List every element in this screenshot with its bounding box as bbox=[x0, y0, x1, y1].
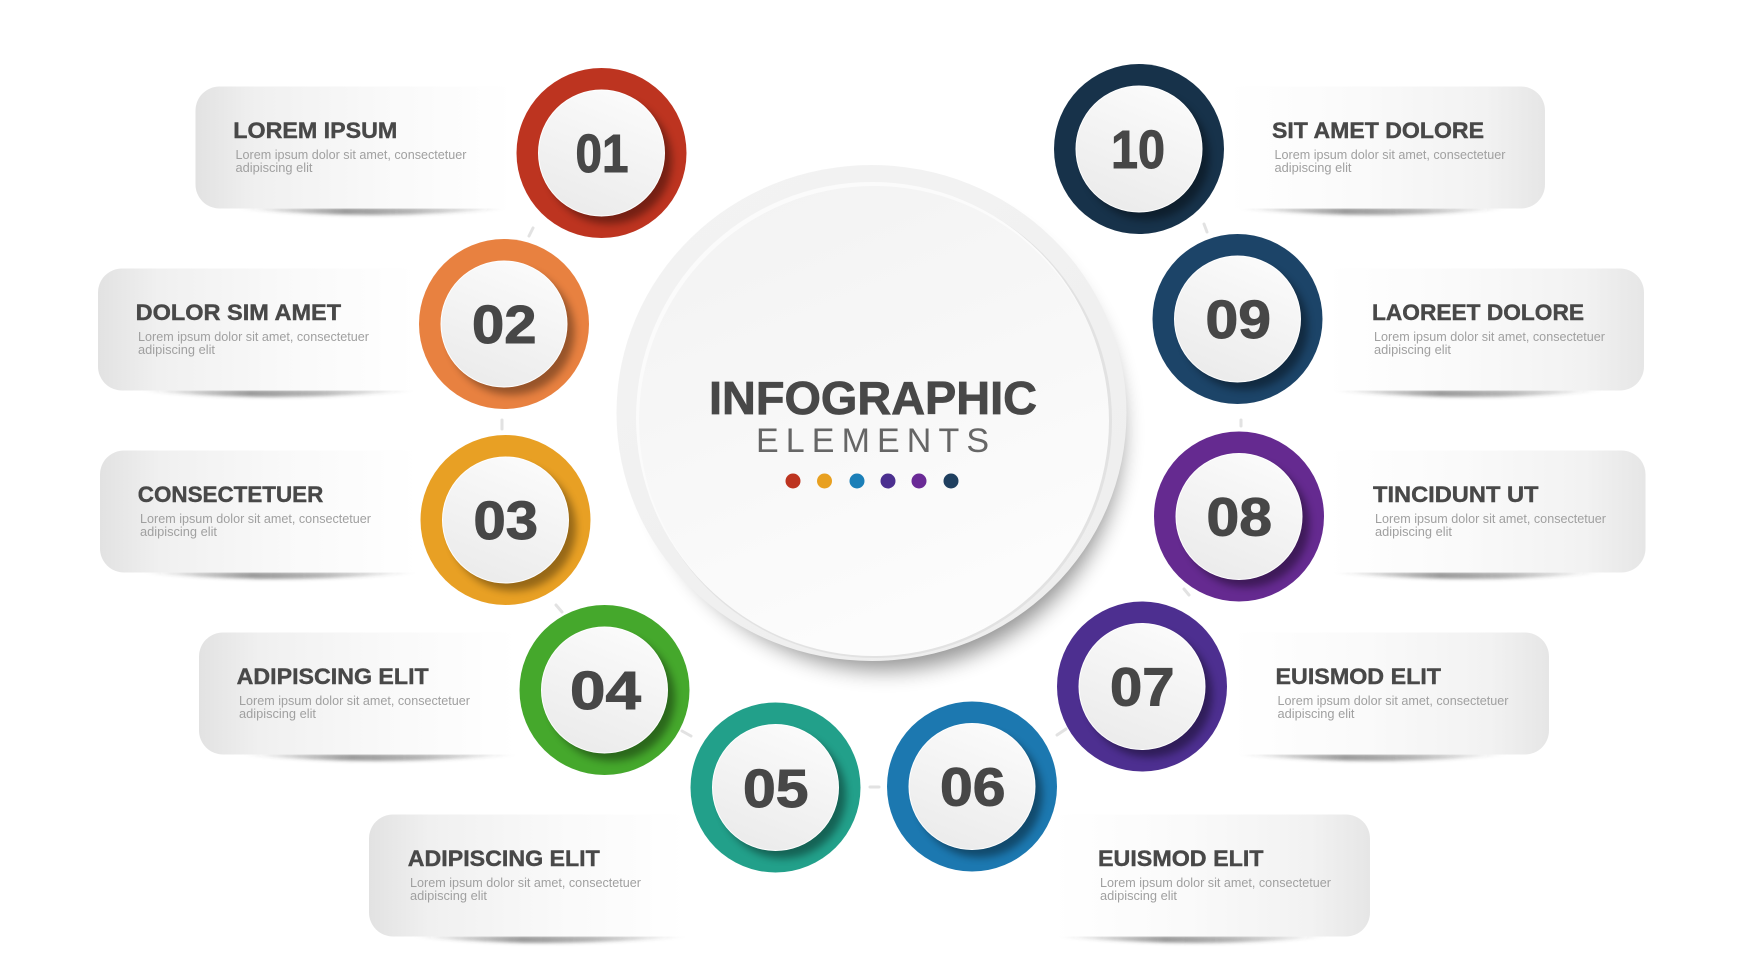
badge 06: 06 bbox=[940, 758, 1006, 818]
heading 10: SIT AMET DOLORE bbox=[1272, 118, 1484, 143]
heading 07: EUISMOD ELIT bbox=[1276, 664, 1442, 689]
connector ticks bbox=[502, 224, 1241, 787]
text 08 bbox=[1375, 511, 1607, 539]
text 03: Lorem ipsum dolor sit amet, consectetuer bbox=[140, 511, 372, 526]
text 10 bbox=[1274, 147, 1506, 175]
text 08: adipiscing elit bbox=[1375, 524, 1452, 539]
text 03 bbox=[140, 511, 372, 539]
text 04: Lorem ipsum dolor sit amet, consectetuer bbox=[239, 693, 471, 708]
badge 02 bbox=[419, 239, 589, 409]
text 02: Lorem ipsum dolor sit amet, consectetuer bbox=[138, 329, 370, 344]
heading 08: TINCIDUNT UT bbox=[1373, 482, 1539, 507]
colour dots bbox=[786, 474, 958, 488]
badge 01: 01 bbox=[576, 124, 628, 184]
central circle bbox=[616, 165, 1126, 670]
text 06: adipiscing elit bbox=[1100, 888, 1177, 903]
badge 10: 10 bbox=[1111, 120, 1165, 180]
text 03: adipiscing elit bbox=[140, 524, 217, 539]
badge 03: 03 bbox=[474, 491, 538, 551]
text 07: adipiscing elit bbox=[1278, 706, 1355, 721]
central circle inner rim bbox=[638, 184, 1112, 658]
central circle shadow bbox=[646, 194, 1122, 670]
badge 07 bbox=[1057, 602, 1227, 772]
panel: 05 adipiscing elit bbox=[369, 814, 704, 943]
title: infographic: INFOGRAPHIC bbox=[709, 372, 1037, 424]
text 10: adipiscing elit bbox=[1274, 160, 1352, 175]
panel: 08 tincidunt ut bbox=[1310, 450, 1646, 579]
text 06 bbox=[1100, 875, 1332, 903]
text 01 bbox=[236, 147, 467, 175]
text 09: Lorem ipsum dolor sit amet, consectetuer bbox=[1374, 329, 1606, 344]
text 07: Lorem ipsum dolor sit amet, consectetuer bbox=[1278, 693, 1509, 708]
panel: 03 consectetuer bbox=[100, 450, 435, 579]
text 02: adipiscing elit bbox=[138, 342, 215, 357]
text 08: Lorem ipsum dolor sit amet, consectetuer bbox=[1375, 511, 1607, 526]
heading 01: LOREM IPSUM bbox=[233, 118, 397, 143]
heading 03: CONSECTETUER bbox=[138, 482, 323, 507]
badge 09 bbox=[1152, 234, 1322, 404]
text 04: adipiscing elit bbox=[239, 706, 316, 721]
central circle highlight bbox=[636, 182, 1108, 654]
text 01: Lorem ipsum dolor sit amet, consectetuer bbox=[236, 147, 467, 162]
badge 10 bbox=[1054, 64, 1224, 234]
text 05: Lorem ipsum dolor sit amet, consectetuer bbox=[410, 875, 642, 890]
badge 08: 08 bbox=[1206, 488, 1272, 548]
text 01: adipiscing elit bbox=[236, 160, 313, 175]
badge 02: 02 bbox=[472, 295, 536, 355]
text 02 bbox=[138, 329, 370, 357]
panel: 09 laoreet dolore bbox=[1309, 268, 1644, 397]
text 06: Lorem ipsum dolor sit amet, consectetuer bbox=[1100, 875, 1332, 890]
central circle face bbox=[639, 186, 1109, 656]
panel: 04 adipiscing elit bbox=[199, 632, 534, 761]
text 09: adipiscing elit bbox=[1374, 342, 1451, 357]
central circle outer rim bbox=[616, 165, 1126, 661]
heading 04: ADIPISCING ELIT bbox=[237, 664, 429, 689]
panel: 07 euismod elit bbox=[1214, 632, 1549, 761]
heading 02: DOLOR SIM AMET bbox=[136, 300, 342, 325]
badge 07: 07 bbox=[1110, 658, 1174, 718]
badge 04 bbox=[520, 605, 690, 775]
badge 08 bbox=[1154, 432, 1324, 602]
badge 04: 04 bbox=[570, 661, 641, 721]
heading 06: EUISMOD ELIT bbox=[1098, 846, 1264, 871]
panel: 02 dolor sim amet bbox=[98, 268, 433, 397]
text 05 bbox=[410, 875, 642, 903]
badge 05: 05 bbox=[743, 759, 808, 819]
badge 05 bbox=[690, 702, 860, 872]
badge 09: 09 bbox=[1206, 290, 1271, 350]
subtitle: elements: ELEMENTS bbox=[756, 422, 989, 460]
heading 09: LAOREET DOLORE bbox=[1372, 300, 1584, 325]
text 05: adipiscing elit bbox=[410, 888, 487, 903]
text 04 bbox=[239, 693, 471, 721]
text 09 bbox=[1374, 329, 1606, 357]
panel: 01 lorem ipsum bbox=[196, 86, 530, 215]
badge 06 bbox=[887, 702, 1057, 872]
heading 05: ADIPISCING ELIT bbox=[408, 846, 600, 871]
text 10: Lorem ipsum dolor sit amet, consectetuer bbox=[1274, 147, 1506, 162]
text 07 bbox=[1278, 693, 1509, 721]
panel: 10 sit amet dolore bbox=[1210, 86, 1545, 215]
badge 03 bbox=[420, 435, 590, 605]
badge 01 bbox=[516, 68, 686, 238]
panel: 06 euismod elit bbox=[1035, 814, 1370, 943]
